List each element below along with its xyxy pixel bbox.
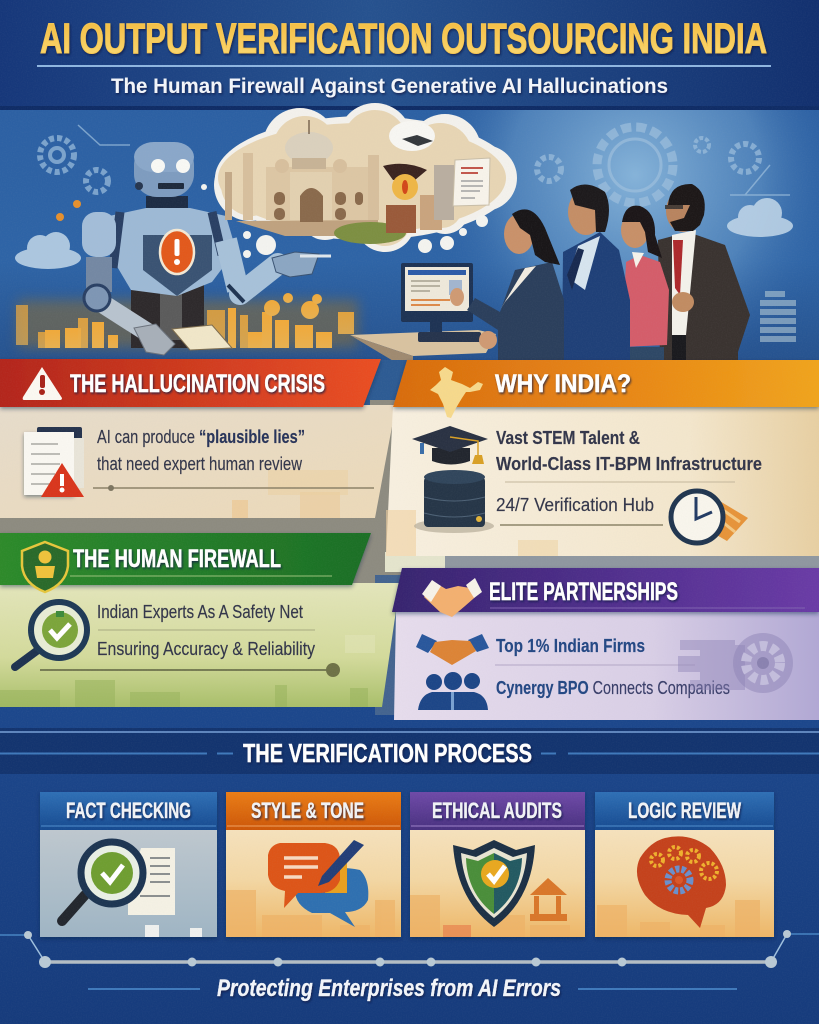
consultant 4: man in brown suit xyxy=(658,184,750,362)
panel body xyxy=(394,611,819,720)
panel text: 24/7 Verification Hub xyxy=(496,495,654,515)
thought cloud with Taj Mahal and city xyxy=(214,103,517,252)
icon: speech bubbles and pen xyxy=(268,840,368,927)
panel: the human firewall xyxy=(0,533,400,707)
hero illustration xyxy=(0,103,819,362)
small pictogram in cloud xyxy=(389,121,435,151)
document inside cloud xyxy=(453,158,490,206)
icon: India map xyxy=(430,367,483,418)
icon: shield with person xyxy=(22,542,68,592)
footer tagline: Protecting Enterprises from AI Errors xyxy=(217,975,561,1002)
card heading: FACT CHECKING xyxy=(66,798,191,823)
panel heading: ELITE PARTNERSHIPS xyxy=(489,578,678,606)
panel text: Vast STEM Talent & xyxy=(496,428,640,448)
panel banner xyxy=(0,533,371,585)
icon: document with warning xyxy=(24,427,84,497)
card heading: LOGIC REVIEW xyxy=(628,798,741,823)
panel text: World-Class IT-BPM Infrastructure xyxy=(496,454,762,474)
panel: the hallucination crisis xyxy=(0,359,396,518)
panel banner xyxy=(392,568,819,612)
section: verification process xyxy=(0,728,819,774)
header band xyxy=(0,0,819,111)
consultant 3: woman in pink xyxy=(621,206,669,362)
panel text xyxy=(496,428,762,515)
Taj Mahal xyxy=(225,132,379,220)
card: logic review xyxy=(595,792,774,937)
icon: clock xyxy=(671,491,748,543)
document under robot hand xyxy=(172,325,232,350)
city and warning badge inside cloud xyxy=(386,205,416,233)
panel text: Indian Experts As A Safety Net xyxy=(97,602,303,622)
panel text xyxy=(97,427,305,474)
gold city data blocks xyxy=(16,293,358,348)
process timeline xyxy=(0,930,819,968)
icon: magnifier and document xyxy=(62,842,175,921)
icon: warning triangle xyxy=(23,367,62,400)
consultant 2: man in blue suit xyxy=(562,184,630,362)
thought bubbles xyxy=(201,184,488,258)
card: style and tone xyxy=(226,792,401,937)
panel: elite partnerships xyxy=(392,568,819,720)
panel heading: THE HUMAN FIREWALL xyxy=(73,545,281,573)
panel text: Top 1% Indian Firms xyxy=(496,636,645,656)
panel heading: THE HALLUCINATION CRISIS xyxy=(70,370,325,398)
background gears and clouds xyxy=(40,125,790,203)
panel text xyxy=(496,636,730,698)
icon: temple xyxy=(530,878,567,921)
panel zone backdrop xyxy=(0,360,819,715)
icon: blue handshake xyxy=(416,634,489,665)
panel text: that need expert human review xyxy=(97,454,303,474)
computer monitor xyxy=(401,263,481,342)
icon: magnifying glass with check xyxy=(15,602,87,667)
card: fact checking xyxy=(40,792,217,937)
icon: faint gear xyxy=(678,633,793,693)
icon: graduation cap xyxy=(412,426,488,464)
icon: team of three xyxy=(418,672,488,710)
desk xyxy=(350,330,496,356)
panel text: Ensuring Accuracy & Reliability xyxy=(97,639,315,659)
subtitle: The Human Firewall Against Generative AI Hallucinations xyxy=(111,75,668,98)
server stack graphic xyxy=(760,291,796,342)
section heading: THE VERIFICATION PROCESS xyxy=(243,738,532,768)
card heading: STYLE & TONE xyxy=(251,798,364,823)
icon: shield with check xyxy=(453,840,535,927)
panel banner xyxy=(0,359,381,407)
panel body xyxy=(0,405,396,518)
panel body xyxy=(386,405,819,556)
icon: brain with gears xyxy=(637,836,726,928)
panel text: AI can produce “plausible lies” xyxy=(97,427,305,447)
robot xyxy=(82,142,331,355)
card: ethical audits xyxy=(410,792,585,937)
panel text xyxy=(97,602,315,659)
icon: database server xyxy=(414,470,494,533)
panel: why india xyxy=(386,360,819,556)
panel body xyxy=(0,583,400,707)
panel text: Cynergy BPO Connects Companies xyxy=(496,678,730,698)
card heading: ETHICAL AUDITS xyxy=(432,798,562,823)
consultant 1: woman in dark blazer xyxy=(450,209,564,362)
panel banner xyxy=(393,360,819,407)
panel heading: WHY INDIA? xyxy=(495,370,631,398)
icon: gold handshake xyxy=(422,578,482,617)
